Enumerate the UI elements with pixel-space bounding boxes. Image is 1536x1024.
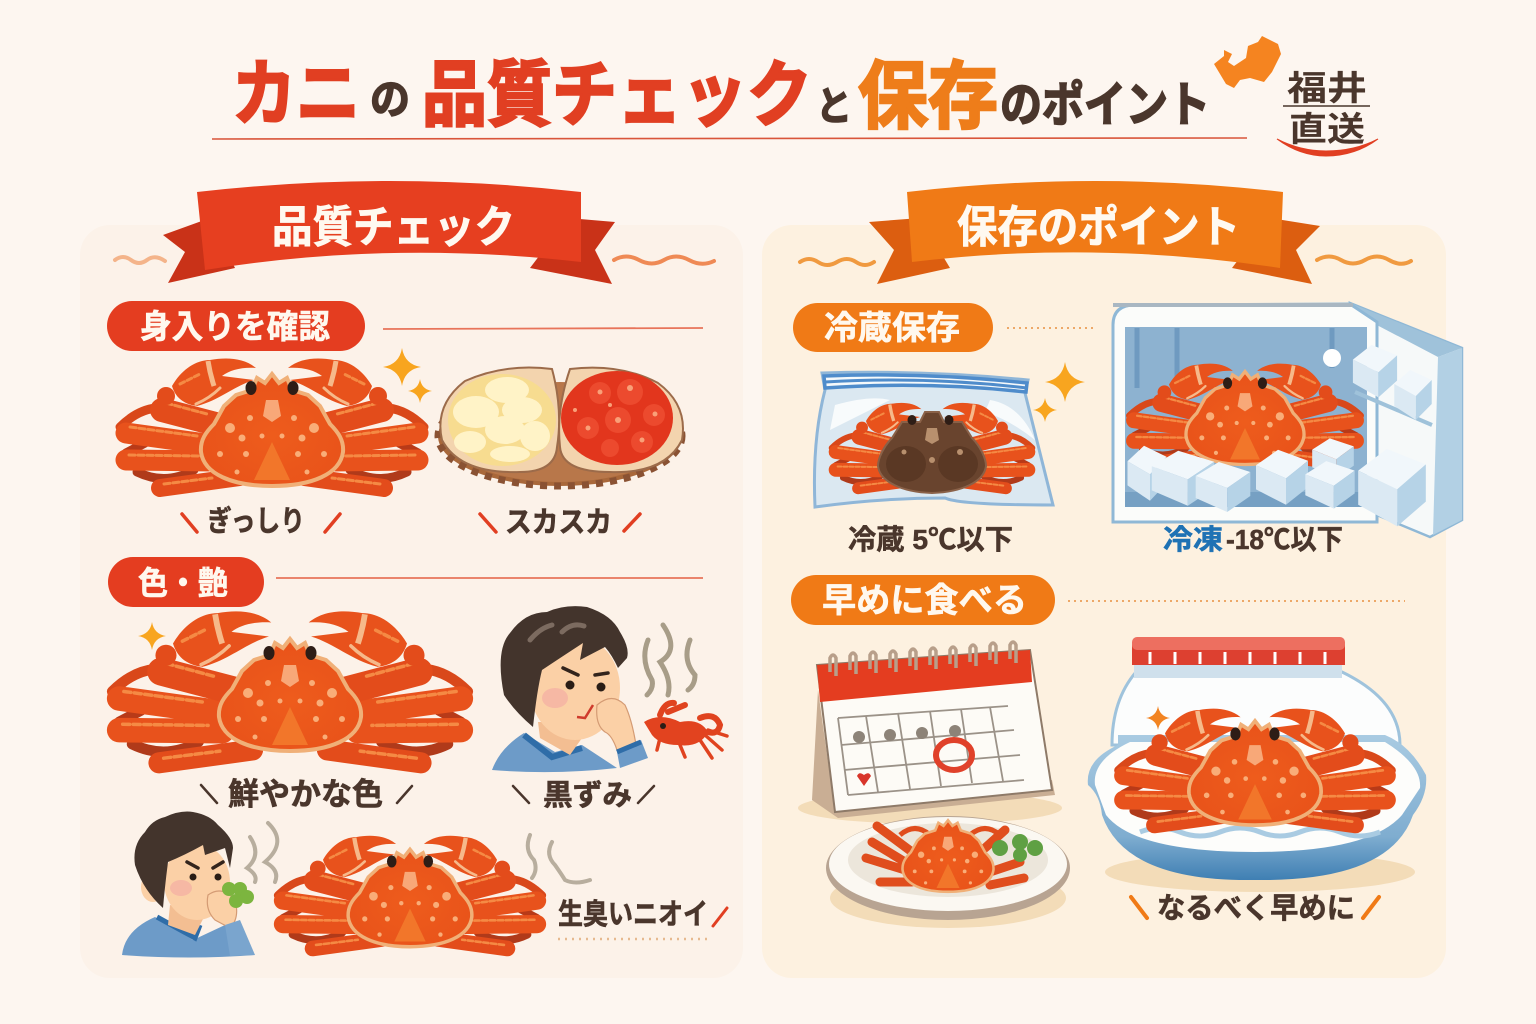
logo: 福井直送: 直送	[1289, 111, 1365, 149]
pill: 色・艶	[108, 557, 264, 607]
pill: 早めに食べる: 早めに食べる	[822, 582, 1027, 620]
illustration: freezer with crab and ice	[1113, 303, 1462, 537]
label: なるべく早めに: なるべく早めに	[1157, 893, 1355, 925]
icon: smell waves	[645, 625, 695, 695]
label: 鮮やかな色: 鮮やかな色	[228, 777, 383, 812]
crab: smell check	[278, 836, 542, 948]
icon: Fukui map	[1214, 36, 1281, 88]
icon: smell waves small	[247, 823, 277, 882]
title: 保存	[858, 55, 998, 138]
pill: 冷蔵保存: 冷蔵保存	[824, 309, 960, 346]
illustration: container with crab on plate	[1088, 637, 1426, 892]
illustration: plate with crab	[826, 816, 1070, 928]
label: スカスカ: スカスカ	[505, 507, 612, 539]
banner: storage points	[869, 181, 1320, 284]
illustration: person covering nose	[122, 812, 255, 958]
label: ぎっしり: ぎっしり	[207, 505, 305, 538]
crab: full of meat	[120, 359, 424, 488]
icon: sparkles	[383, 348, 432, 403]
title: カニ	[232, 55, 360, 135]
panel: storage points	[762, 225, 1446, 978]
icon: sparkle	[1146, 706, 1170, 730]
title: 品質チェック	[422, 56, 812, 136]
icon: sparkle	[138, 622, 166, 650]
pill: 冷蔵保存	[793, 303, 993, 352]
illustration: crab in zip bag	[814, 372, 1053, 507]
illustration: crab shell with miso and roe	[438, 368, 683, 486]
banner: storage points: 保存のポイント	[957, 203, 1240, 252]
title: のポイント	[1000, 79, 1210, 132]
pill: 身入りを確認	[107, 301, 365, 351]
icon: smell waves right	[528, 835, 590, 882]
banner: quality check: 品質チェック	[272, 203, 515, 252]
pill: 身入りを確認: 身入りを確認	[140, 308, 330, 345]
label: 黒ずみ: 黒ずみ	[543, 779, 632, 812]
logo: 福井直送: 福井	[1287, 70, 1367, 108]
pill: 早めに食べる	[791, 575, 1055, 625]
icon: sparkles	[1033, 362, 1085, 422]
illustration: person holding nose	[492, 606, 648, 772]
logo: 福井直送	[1277, 70, 1378, 156]
label: 生臭いニオイ: 生臭いニオイ	[558, 898, 708, 931]
icon: green herb	[222, 882, 254, 908]
panel: quality check	[80, 225, 743, 978]
icon: small dark red crab	[644, 703, 727, 758]
label: 冷凍 -18℃以下	[1163, 524, 1343, 555]
pill: 色・艶: 色・艶	[138, 565, 228, 601]
decorative waves	[115, 256, 1411, 265]
label: 冷凍 -18℃以下: -18℃以下	[1226, 524, 1343, 555]
illustration: calendar	[798, 642, 1062, 824]
crab: vivid colour	[112, 611, 468, 763]
title: と	[816, 85, 852, 129]
label: 冷蔵 5℃以下: 冷蔵 5℃以下	[848, 524, 1013, 555]
label: 黒ずみ	[513, 779, 654, 812]
banner: quality check	[163, 181, 615, 284]
title	[212, 55, 1247, 139]
title: の	[370, 76, 410, 123]
label: 冷凍 -18℃以下: 冷凍	[1163, 524, 1223, 555]
